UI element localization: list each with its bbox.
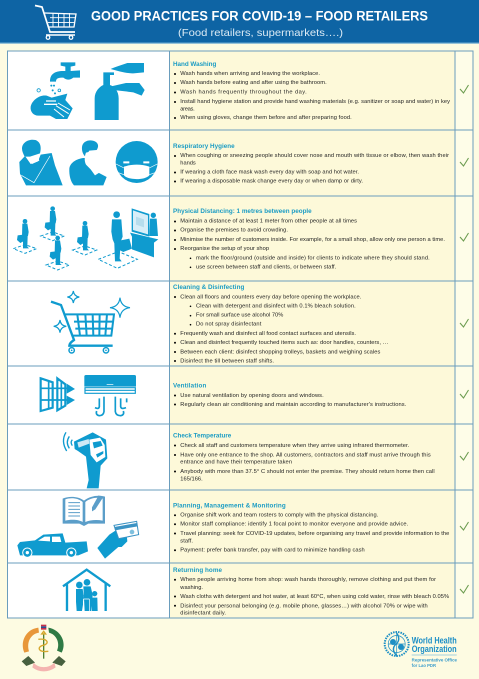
icon: open window with airflow [41,378,75,411]
panel text: check temperature: Anybody with more than 37.5° C should not enter the premise. They should return home then call [180,469,435,475]
panel text: ventilation: Ventilation [173,383,206,390]
panel text: physical distancing [173,208,445,270]
panel text: cleaning and disinfecting: Clean with detergent and disinfect with 0.1% bleach solution. [196,303,356,309]
panel text: planning, management and monitoring: staff. [180,538,193,544]
logo: World Health Organization: for Lao PDR [412,663,436,668]
panel text: respiratory hygiene: Respiratory Hygiene [173,143,235,150]
panel text: cleaning and disinfecting: Clean and disinfect frequently touched items such as: door handles, counters, … [180,340,388,346]
panel: returning home [63,570,110,611]
panel text: returning home: Returning home [173,567,222,574]
panel text: physical distancing: mark the floor/ground (outside and inside) for clients to indicate where they should stand. [196,255,430,261]
icon: hands under tap [31,62,80,119]
panel text: physical distancing: Physical Distancing: 1 metres between people [173,208,312,215]
check mark: ventilation [460,390,468,398]
panel text: returning home: washing. [179,585,203,591]
panel text: returning home: disinfectant daily. [180,611,226,617]
panel: cleaning and disinfecting [51,291,130,353]
panel text: respiratory hygiene: If wearing a disposable mask change every day or when damp or dirty. [180,179,363,185]
panel text: hand washing: Hand Washing [173,61,216,68]
check mark: respiratory hygiene [460,158,468,166]
panel text: cleaning and disinfecting: Do not spray disinfectant [196,322,262,328]
panel text: hand washing [173,61,450,121]
panel: planning, management and monitoring [17,495,139,559]
panel: respiratory hygiene [19,140,158,185]
logo: World Health Organization: Organization [412,644,457,654]
icon: shopping cart [35,6,76,39]
panel text: returning home: Wash cloths with detergent and hot water, at least 60°C, when using cold water, rinse with bleach 0.05% [180,594,449,600]
icon: notebook and pencil [63,495,105,526]
panel text: physical distancing: Organise the premises to avoid crowding. [180,228,288,234]
panel text: ventilation: Regularly clean air conditioning and maintain according to manufacturer's instructions. [180,402,407,408]
WHO name: World Health [412,636,457,646]
WHO globe emblem [385,632,409,657]
sparkle stars [67,291,79,303]
icon: queue of people on floor markers [13,206,158,270]
panel text: hand washing: Wash hands when arriving and leaving the workplace. [180,71,320,77]
panel text: physical distancing: Reorganise the setup of your shop [180,246,269,252]
panel: ventilation [41,375,136,416]
panel text: physical distancing: use screen between staff and clients, or between staff. [196,264,337,270]
panel text: cleaning and disinfecting: Disinfect the till between staff shifts. [180,358,274,364]
panel text: returning home [173,567,449,617]
floor marker and person 3 [46,236,69,270]
check mark: hand washing [460,85,468,93]
sneeze screen and counter [130,208,158,257]
icon: family in house [63,570,110,611]
logo: World Health Organization [385,632,458,668]
panel text: hand washing: When using gloves, change them before and after preparing food. [180,115,352,121]
WHO office name: Representative Office [412,658,458,662]
panel text: hand washing: Wash hands before eating and after using the bathroom. [180,80,327,86]
panel text: respiratory hygiene: hands [180,160,196,166]
panel text: planning, management and monitoring: Organise shift work and team rosters to comply with the physical distancing. [180,513,379,519]
panel: hand washing [31,62,145,120]
panel: check temperature [63,432,107,488]
panel text: cleaning and disinfecting: Between each client: disinfect shopping trolleys, baskets and weighing scales [180,349,380,355]
icon: hand holding payment card [97,521,139,559]
panel text: check temperature [173,433,435,482]
panel text: check temperature: Have only one entrance to the shop. All customers, contractors and staff must arrive through this [180,452,431,458]
icon: person coughing into elbow [19,140,63,185]
check mark: returning home [460,585,468,593]
panel text: returning home: Disinfect your personal belonging (e.g. mobile phone, glasses…) with alcohol 70% or wipe with [180,603,428,609]
panel text: respiratory hygiene [173,143,449,185]
panel text: check temperature: Check Temperature [173,433,232,440]
panel text: planning, management and monitoring: Planning, Management & Monitoring [173,502,286,509]
icon: face mask [116,141,158,183]
panel text: hand washing: Wash hands frequently throughout the day. [180,90,307,96]
icon: pickup truck [17,533,88,557]
panel text: cleaning and disinfecting: Cleaning & Disinfecting [173,284,244,291]
floor marker and large person [98,211,137,268]
panel text: cleaning and disinfecting: For small surface use alcohol 70% [196,313,283,319]
panel text: physical distancing: Maintain a distance of at least 1 meter from other people at all times [180,219,357,225]
icon: soap dispenser [95,63,145,120]
check mark: planning [460,522,468,530]
check mark: physical distancing [460,233,468,241]
panel text: cleaning and disinfecting: Clean all floors and counters every day before opening the workplace. [180,294,362,300]
panel text: check temperature: Check all staff and customers temperature when they arrive using infrared thermometer. [180,443,410,449]
icon: air conditioner [84,375,136,416]
panel text: planning, management and monitoring: Monitor staff compliance: identify 1 focal point to monitor everyone and provide advice. [180,522,409,528]
panel text: cleaning and disinfecting: Frequently wash and disinfect all food contact surfaces and utensils. [180,331,356,337]
check mark: cleaning and disinfecting [460,319,468,327]
panel text: planning, management and monitoring [173,502,449,554]
icon: clean shopping cart [51,291,130,353]
panel text: hand washing: Install hand hygiene station and provide hand washing materials (e.g. sanitizer or soap and water) in key [180,99,450,105]
header banner [0,0,479,44]
panel: physical distancing [13,206,158,270]
icon: person sneezing into tissue [69,140,107,185]
title: GOOD PRACTICES FOR COVID-19 – FOOD RETAILERS [91,8,428,24]
panel text: planning, management and monitoring: Payment: prefer bank transfer, pay with card to minimize handling cash [180,548,365,554]
floor marker and person 4 [73,221,97,255]
panel text: physical distancing: Minimise the number of customers inside. For example, for a small shop, allow only one person a time. [180,237,445,243]
panel text: hand washing: areas. [180,106,195,112]
panel text: planning, management and monitoring: Travel planning: seek for COVID-19 updates, before organising any travel and provide information to the [180,531,449,537]
panel text: cleaning and disinfecting [173,284,388,364]
panel text: check temperature: entrance and have their temperature taken [180,460,292,466]
subtitle: (Food retailers, supermarkets….) [178,27,343,39]
panel text: check temperature: 165/166. [180,476,203,482]
icon: infrared thermometer [63,432,107,488]
floor marker and person 2 [41,206,64,241]
floor marker and person 1 [13,219,37,253]
check mark: check temperature [460,452,468,460]
panel text: respiratory hygiene: If wearing a cloth face mask wash every day with soap and hot water. [180,170,359,176]
panel text: ventilation [173,383,407,408]
panel text: ventilation: Use natural ventilation by opening doors and windows. [180,393,324,399]
panel text: respiratory hygiene: When coughing or sneezing people should cover nose and mouth with tissue or elbow, then wash their [180,153,449,159]
logo: Lao Ministry of Health emblem [22,625,66,671]
panel text: returning home: When people arriving home from shop: wash hands thoroughly, remove clothing and put them for [180,577,436,583]
